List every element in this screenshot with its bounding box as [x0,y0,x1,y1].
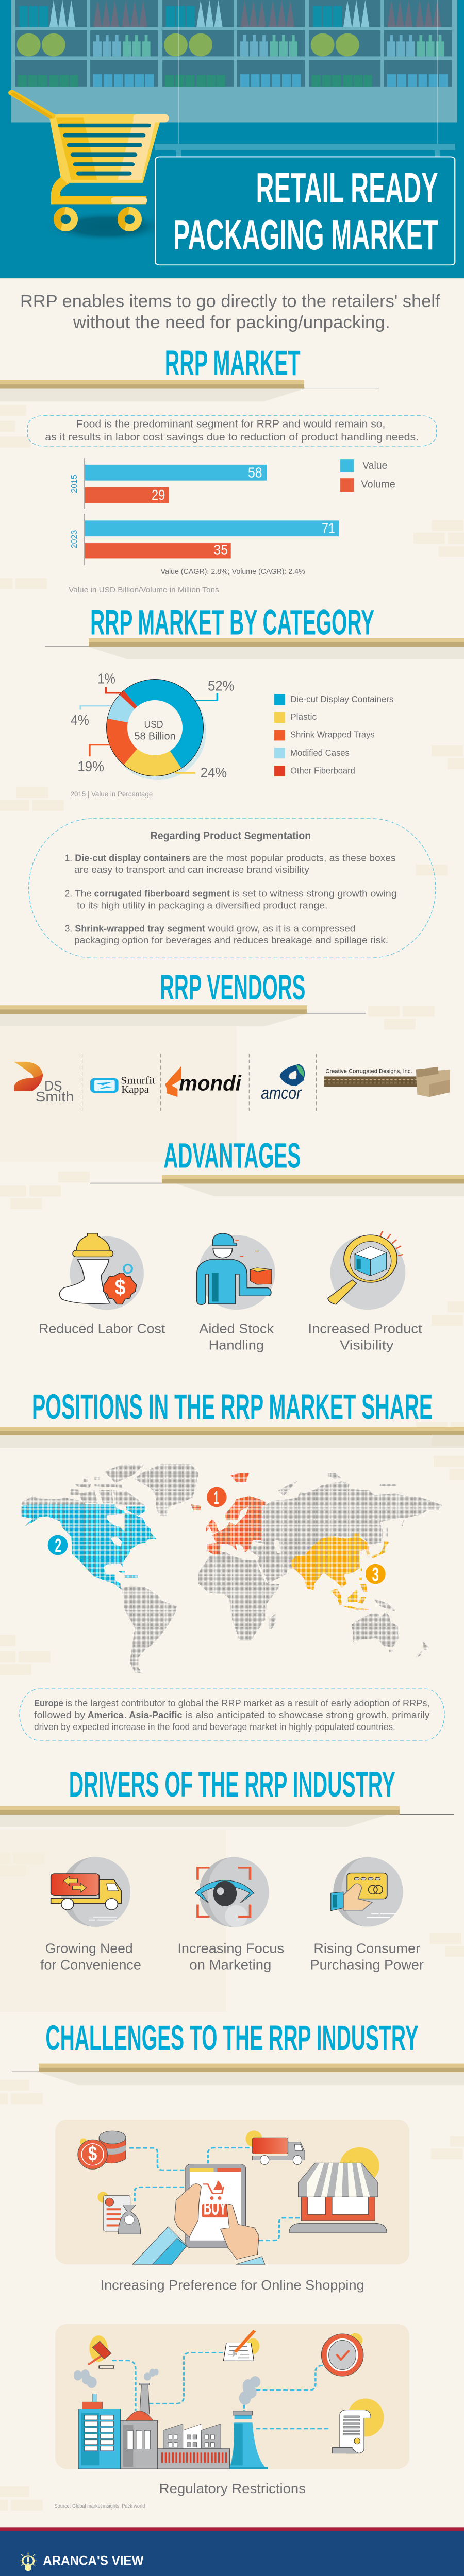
panel: regarding product segmentation: 3. [65,923,72,934]
driver labels: Growing Need [45,1941,133,1956]
document and pen [223,2331,259,2361]
driver labels: Rising Consumer [313,1941,420,1956]
bar chart: 58 [248,464,262,480]
marker 2: 2 [55,1534,61,1556]
logo: Smurfit Kappa: Smurfit [121,1075,156,1087]
logo: Smurfit Kappa [90,1075,156,1095]
driver labels: Purchasing Power [310,1958,424,1973]
advantage labels: Increased Product [308,1321,422,1336]
driver labels: Increasing Focus [177,1941,284,1956]
donut legend: Modified Cases [290,748,350,758]
section: RRP market [0,343,464,659]
panel: Aranca's view: ARANCA'S VIEW [43,2554,144,2568]
gavel [88,2335,114,2368]
certificate scroll [333,2398,384,2453]
online shopping label: Increasing Preference for Online Shopping [101,2278,364,2293]
donut note: 2015 | Value in Percentage [71,791,153,798]
storefront [289,2147,387,2233]
callout: food segment: Food is the predominant segment for RRP and would remain so, [76,418,385,430]
driver labels: on Marketing [189,1958,271,1973]
advantage labels: Aided Stock [199,1321,274,1336]
logo: Amcor [261,1064,305,1103]
callout: regional summary: . [124,1709,127,1720]
section: drivers and challenges [0,1765,464,2104]
marker 3 [366,1563,386,1585]
shopping cart icon [12,93,170,242]
sign hanger [155,144,455,157]
donut callouts: 52% [208,678,235,694]
callout: regional summary [20,1689,444,1740]
unit note: Value in USD Billion/Volume in Million Tons [69,586,219,595]
section: footer [0,2481,464,2576]
bar chart: 29 [152,487,165,503]
driver labels: for Convenience [40,1958,141,1973]
panel: regarding product segmentation [29,819,436,958]
tablet with hands: BUY [204,2195,226,2219]
panel: regulatory restrictions [55,2324,409,2469]
donut chart: 58 Billion [134,731,175,742]
marker 3: 3 [372,1563,379,1585]
panel: regarding product segmentation: Regarding Product Segmentation [151,830,311,842]
donut legend: Die-cut Display Containers [290,694,393,704]
bar chart [85,458,339,565]
panel: regarding product segmentation: Die-cut display containers [75,852,190,863]
driver labels [40,1941,424,1973]
callout: regional summary: America [88,1709,124,1720]
logo: Mondi [165,1066,242,1097]
illustration: regulatory restrictions [74,2331,384,2469]
year axis labels: 2023 [70,530,79,548]
CAGR note: Value (CAGR): 2.8%; Volume (CAGR): 2.4% [161,567,305,575]
header banner [0,0,464,332]
pale backdrop panel: vendors [0,1027,237,1162]
donut callouts: 4% [71,712,89,728]
shelves [11,0,457,144]
factory skyline [78,2383,268,2469]
panel: regarding product segmentation: corrugated fiberboard segment [94,888,230,899]
logo: Creative Corrugated Designs: Creative Corrugated Designs, Inc. [325,1068,412,1074]
section: positions shelf [0,1422,464,1675]
logo: Smurfit Kappa: Kappa [121,1084,149,1095]
advantage labels: Reduced Labor Cost [39,1321,165,1336]
panel: regarding product segmentation: 1. [65,852,72,863]
logo: Creative Corrugated Designs [324,1067,450,1097]
donut callouts: 24% [201,765,227,781]
pale backdrop panel: drivers [0,1830,226,2012]
panel: regarding product segmentation: is set to witness strong growth owing [233,888,397,899]
bar chart: 71 [322,520,335,536]
approval badge [321,2333,363,2376]
panel: online shopping [55,2120,409,2264]
map: Americas [22,1464,201,1673]
donut chart [106,679,206,780]
logo: DS Smith: Smith [36,1089,74,1105]
panel: regarding product segmentation: are the most popular products, as these boxes [193,852,396,863]
section: vendors, advantages [0,1054,464,1427]
panel: regarding product segmentation: packaging option for beverages and reduces breakage and spillage risk. [74,935,388,945]
donut legend [274,694,393,776]
bar chart legend: Volume [361,478,395,490]
icon: eye, marketing [195,1857,269,1927]
callout: regional summary: Europe [34,1698,63,1708]
icon: reduced labor cost [59,1233,144,1310]
icon: truck, convenience [51,1857,130,1927]
advantage labels [39,1321,422,1352]
icon: aided stock handling [197,1233,275,1310]
coins [78,2131,126,2169]
donut chart: USD [144,719,163,731]
logo: DS Smith [14,1062,74,1105]
donut callouts: 1% [97,670,115,687]
advantage labels: Visibility [340,1338,394,1352]
bar chart legend [340,459,395,492]
donut legend: Plastic [290,712,317,722]
coins: $ [88,2142,97,2165]
panel: regarding product segmentation: to its high utility in packaging a diversified product range. [77,900,327,911]
logo: DS Smith: DS [44,1078,62,1094]
regulatory label: Regulatory Restrictions [159,2481,306,2496]
map: Europe, Africa, Asia, Oceania [191,1473,442,1657]
smoke clouds [74,2369,260,2405]
tablet with hands [132,2164,265,2264]
donut callouts [0,670,464,1030]
advantage labels: Handling [209,1338,264,1352]
logo: Amcor: amcor [261,1083,302,1103]
illustrations: challenges [74,2130,464,2469]
logo: Mondi: mondi [179,1072,242,1095]
section: RRP market: RRP MARKET [165,343,301,383]
title sign [155,157,455,265]
world map [22,1464,442,1673]
callout: regional summary: followed by [34,1709,85,1720]
icon: increased product visibility [328,1231,405,1310]
year axis labels [70,474,79,548]
marker 1: 1 [214,1486,219,1508]
marker 1 [207,1486,227,1508]
callout: food segment [27,415,437,446]
intro text [20,292,440,332]
donut callouts: 19% [77,758,104,774]
year axis labels: 2015 [70,474,79,493]
intro text: without the need for packing/unpacking. [73,313,390,332]
bar chart: 35 [213,541,228,557]
delivery truck [245,2130,305,2164]
panel: regarding product segmentation: would grow, as it is a compressed [208,923,355,934]
panel: regarding product segmentation: are easy to transport and can increase brand visibility [74,864,309,875]
marker 2 [48,1534,68,1556]
icon: light bulb [20,2553,37,2571]
donut legend: Other Fiberboard [290,766,355,776]
source note: Source: Global market insights, Pack world [55,2503,145,2510]
callout: regional summary: Asia-Pacific [129,1709,183,1720]
icon: reduced labor cost: $ [115,1275,125,1300]
bar chart legend: Value [362,460,387,471]
panel: regarding product segmentation: 2. [65,888,72,899]
panel: regarding product segmentation: Shrink-wrapped tray segment [75,923,205,934]
donut legend: Shrink Wrapped Trays [290,730,375,740]
panel: Aranca's view [0,2527,464,2576]
panel: regarding product segmentation: The [75,888,92,899]
invoice and money bag [97,2192,141,2234]
icon: credit card, purchasing power [331,1857,403,1927]
illustration: online shopping [78,2130,387,2264]
